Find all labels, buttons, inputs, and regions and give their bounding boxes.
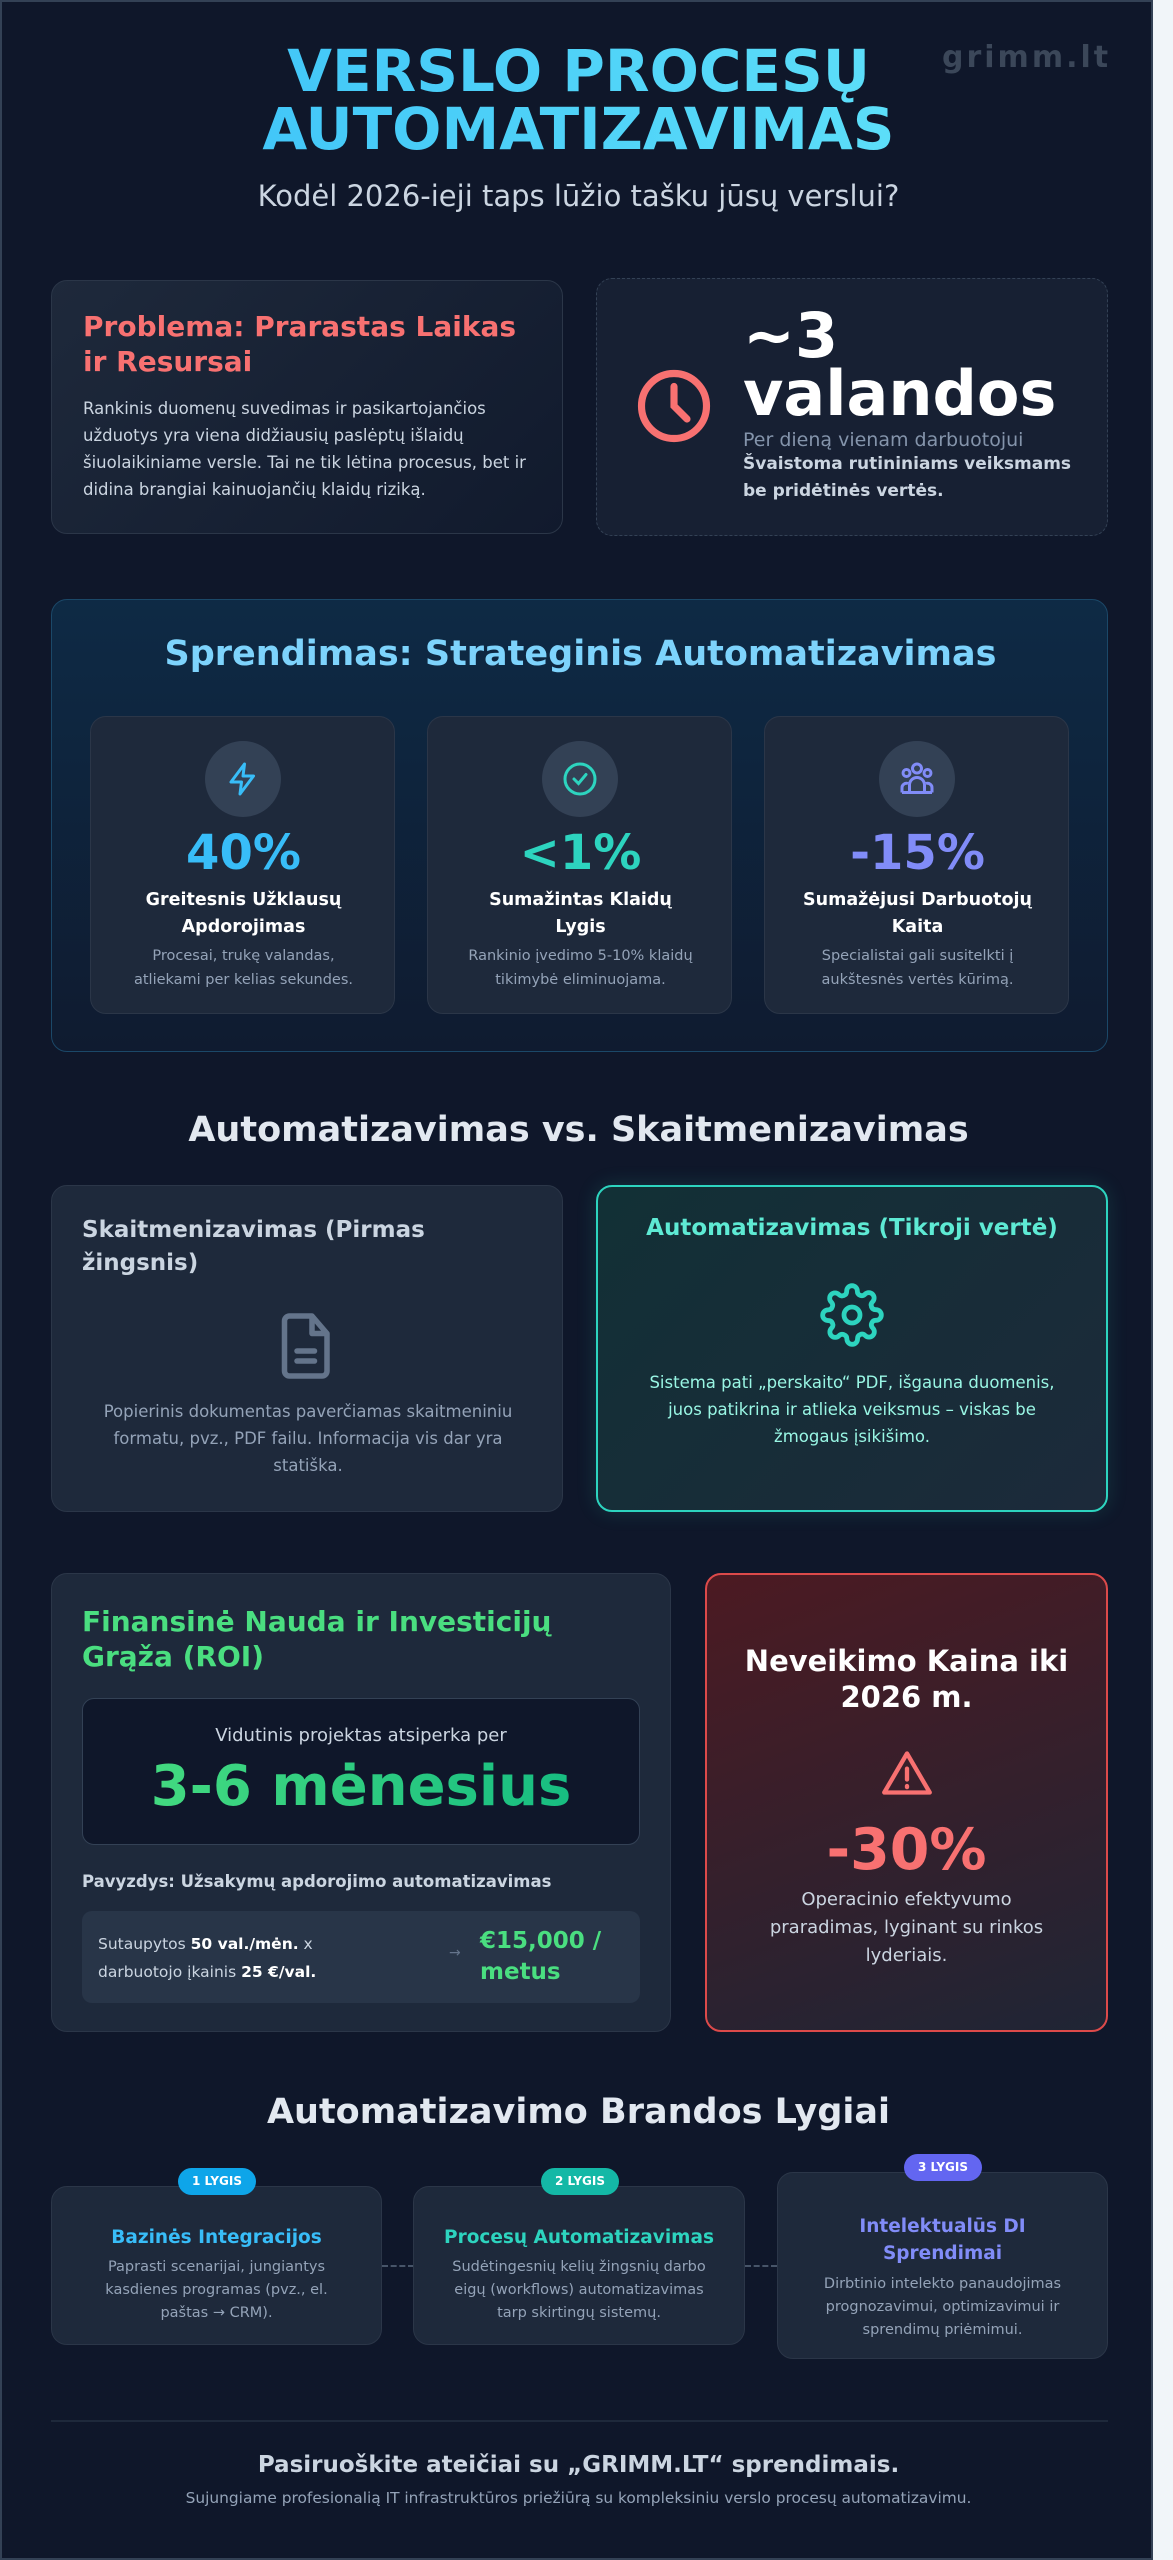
panel: solution (51, 599, 1108, 1052)
panel: digitization: Popierinis dokumentas paverčiamas skaitmeniniu formatu, pvz., PDF failu. Informacija vis dar yra statiška. (104, 1402, 512, 1475)
icon: lightning (205, 741, 281, 817)
footer (186, 2452, 971, 2507)
example box: Sutaupytos 50 val./mėn. x darbuotojo įkainis 25 €/val. (98, 1935, 316, 1981)
payback box: Vidutinis projektas atsiperka per (215, 1725, 507, 1746)
level 2: Sudėtingesnių kelių žingsnių darbo eigų (workflows) automatizavimas tarp skirtingų sistemų. (452, 2259, 706, 2321)
icon: check circle (542, 741, 618, 817)
card: -15%: Specialistai gali susitelkti į aukštesnės vertės kūrimą. (822, 948, 1013, 988)
solution heading: Sprendimas: Strateginis Automatizavimas (165, 634, 996, 674)
panel: automation (596, 1185, 1108, 1512)
card: 40%: Procesai, trukę valandas, atliekami per kelias sekundes. (134, 948, 353, 988)
level 1: Bazinės Integracijos (111, 2227, 322, 2248)
heading: maturity levels: Automatizavimo Brandos Lygiai (267, 2092, 890, 2132)
icon: people (879, 741, 955, 817)
panel: digitization: Skaitmenizavimas (Pirmas žingsnis) (82, 1217, 425, 1276)
level 2 (413, 2186, 745, 2345)
panel: cost of inaction: -30% (826, 1817, 987, 1883)
level 3 (777, 2172, 1108, 2359)
logo: grimm.lt: grimm.lt (942, 40, 1111, 75)
level 1 (51, 2186, 382, 2345)
example box: → (449, 1945, 461, 1961)
level 3: Dirbtinio intelekto panaudojimas prognozavimui, optimizavimui ir sprendimų priėmimui. (824, 2276, 1061, 2338)
stat text: ~3 (743, 299, 838, 372)
stat text: valandos (743, 357, 1056, 430)
panel: ROI (51, 1573, 671, 2032)
example box: €15,000 / metus (480, 1928, 601, 1985)
footer: Sujungiame profesionalią IT infrastruktūros priežiūrą su kompleksiniu verslo procesų automatizavimu. (186, 2489, 971, 2507)
panel: problem (51, 280, 563, 534)
subtitle: Kodėl 2026-ieji taps lūžio tašku jūsų verslui? (258, 179, 899, 213)
level 1: Paprasti scenarijai, jungiantys kasdienes programas (pvz., el. paštas → CRM). (105, 2259, 328, 2321)
panel: ROI: Pavyzdys: Užsakymų apdorojimo automatizavimas (82, 1872, 551, 1891)
title: VERSLO PROCESŲ (287, 37, 870, 105)
card: <1% (427, 716, 732, 1014)
payback box (82, 1698, 640, 1845)
text: 3 LYGIS (918, 2160, 968, 2174)
panel: digitization (51, 1185, 563, 1512)
card: <1%: Sumažintas Klaidų Lygis (489, 890, 672, 937)
text: 1 LYGIS (192, 2174, 242, 2188)
footer: Pasiruoškite ateičiai su „GRIMM.LT“ sprendimais. (258, 2452, 899, 2478)
problem text: Rankinis duomenų suvedimas ir pasikartojančios užduotys yra viena didžiausių paslėptų išlaidų šiuolaikiniame versle. Tai ne tik lėtina procesus, bet ir didina brangiai kainuojančių klaidų riziką. (83, 399, 526, 499)
card: 40%: Greitesnis Užklausų Apdorojimas (146, 890, 341, 937)
connectors (382, 2265, 414, 2267)
card: <1%: Rankinio įvedimo 5-10% klaidų tikimybė eliminuojama. (468, 948, 693, 988)
title: AUTOMATIZAVIMAS (262, 95, 895, 163)
level 2: Procesų Automatizavimas (444, 2227, 714, 2248)
stat text: Švaistoma rutininiams veiksmams be pridėtinės vertės. (743, 454, 1071, 501)
icon: warning (882, 1751, 932, 1795)
card: 40% (90, 716, 395, 1014)
level 3: Intelektualūs DI Sprendimai (859, 2216, 1026, 2264)
panel: cost of inaction (705, 1573, 1108, 2032)
payback box: 3-6 mėnesius (151, 1754, 571, 1819)
text: 2 LYGIS (555, 2174, 605, 2188)
heading: automation vs digitization: Automatizavimas vs. Skaitmenizavimas (188, 1110, 969, 1150)
panel: automation: Sistema pati „perskaito“ PDF, išgauna duomenis, juos patikrina ir atlieka veiksmus – viskas be žmogaus įsikišimo. (649, 1373, 1055, 1446)
card: -15%: -15% (850, 825, 985, 881)
example box (82, 1911, 640, 2003)
stat text (743, 299, 1071, 501)
panel: time lost stat (596, 278, 1108, 536)
stat text: Per dieną vienam darbuotojui (743, 429, 1023, 451)
panel: ROI: Finansinė Nauda ir Investicijų Grąža (ROI) (82, 1605, 552, 1673)
icon: gear (820, 1283, 884, 1347)
icon: document (282, 1313, 330, 1379)
panel: cost of inaction: Neveikimo Kaina iki (745, 1644, 1068, 1678)
title (2, 42, 1155, 158)
card: <1%: <1% (520, 825, 641, 881)
card: 40%: 40% (186, 825, 301, 881)
card: -15%: Sumažėjusi Darbuotojų Kaita (803, 890, 1032, 937)
problem heading: Problema: Prarastas Laikas ir Resursai (83, 310, 516, 378)
panel: automation: Automatizavimas (Tikroji vertė) (646, 1215, 1058, 1241)
icon: clock (638, 370, 710, 442)
panel: cost of inaction: 2026 m. (840, 1680, 973, 1714)
inaction text: Operacinio efektyvumo praradimas, lyginant su rinkos lyderiais. (770, 1889, 1043, 1966)
card: -15% (764, 716, 1069, 1014)
